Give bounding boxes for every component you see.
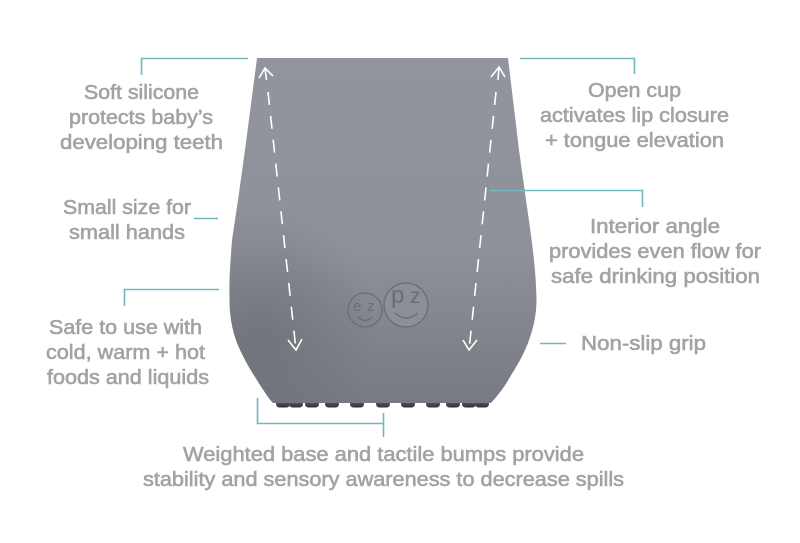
logo: pz [384, 282, 428, 327]
callout: open cup: Open cup [588, 80, 681, 102]
callout: soft silicone: protects baby’s [69, 107, 213, 129]
callout: open cup: + tongue elevation [545, 130, 724, 152]
callout: interior angle: safe drinking position [551, 266, 760, 288]
callout: soft silicone: developing teeth [60, 132, 223, 154]
tactile bumps [276, 400, 489, 408]
callout: soft silicone [60, 58, 248, 154]
callout: open cup: activates lip closure [540, 105, 729, 127]
callout: weighted base: Weighted base and tactile bumps provide [183, 444, 584, 466]
callout: interior angle: Interior angle [590, 216, 720, 238]
callout: temperature safe: foods and liquids [47, 367, 209, 389]
cup body [229, 58, 536, 403]
callout: soft silicone: Soft silicone [84, 82, 199, 104]
callout: small size [63, 197, 218, 244]
callout: interior angle: provides even flow for [549, 241, 761, 263]
logo: pz: p [391, 282, 404, 309]
callout: temperature safe: cold, warm + hot [46, 342, 205, 364]
logo: pz: z [410, 285, 420, 308]
logo: ez: e [353, 298, 361, 315]
cup illustration [229, 58, 536, 408]
arrow: right flow [463, 67, 505, 350]
callout: weighted base: stability and sensory awareness to decrease spills [143, 469, 624, 491]
callout: small size: small hands [69, 222, 185, 244]
callout: non-slip grip: Non-slip grip [581, 333, 706, 355]
callout: small size: Small size for [63, 197, 191, 219]
callout: weighted base [143, 398, 624, 491]
callout: open cup [520, 58, 729, 152]
callout: interior angle [490, 190, 761, 288]
callout: temperature safe: Safe to use with [49, 317, 202, 339]
arrow: left flow [259, 68, 302, 350]
logo: ez: z [367, 298, 374, 315]
logo: ez [348, 293, 382, 327]
callout: temperature safe [46, 290, 219, 389]
